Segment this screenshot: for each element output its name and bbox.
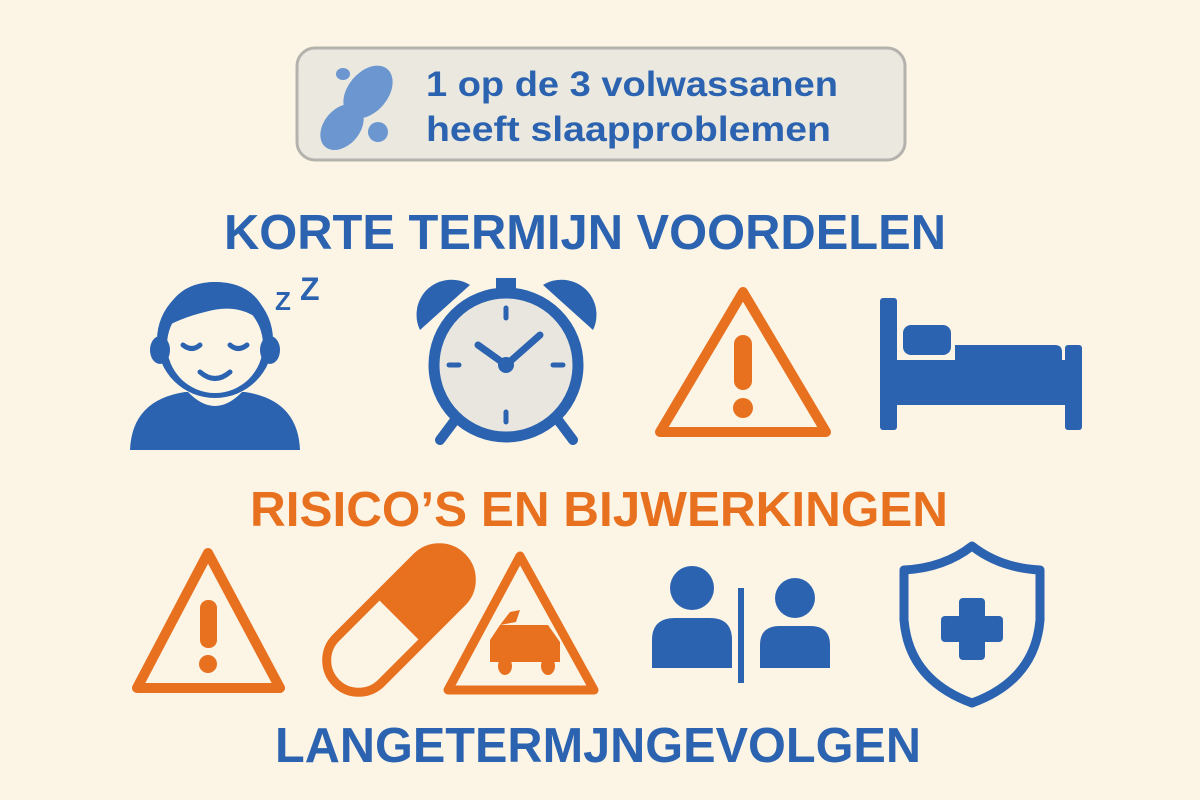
icon: sleeping person [130,271,320,450]
icon: alarm clock [416,278,597,440]
heading: korte termijn voordelen: KORTE TERMIJN VOORDELEN [224,206,946,260]
heading: langetermijngevolgen: LANGETERMJNGEVOLGEN [275,719,921,773]
heading: risico's en bijwerkingen: RISICO’S EN BIJWERKINGEN [250,483,948,537]
icon: car warning triangle [448,556,594,690]
icon: warning triangle (orange) [660,292,826,432]
icon: people separated [652,566,830,683]
stat callout box [297,48,905,160]
icon: sleeping person: Z [275,286,291,316]
icon: bed [880,298,1082,430]
icon: shield with cross [904,546,1040,703]
icon: sleeping person: Z [300,271,320,307]
stat text: heeft slaapproblemen [426,110,831,149]
stat text [426,65,838,149]
stat text: 1 op de 3 volwassanen [426,65,838,104]
icon: warning triangle 2 [137,553,280,688]
icon: pill [313,534,485,706]
icon: footprint [311,56,403,158]
